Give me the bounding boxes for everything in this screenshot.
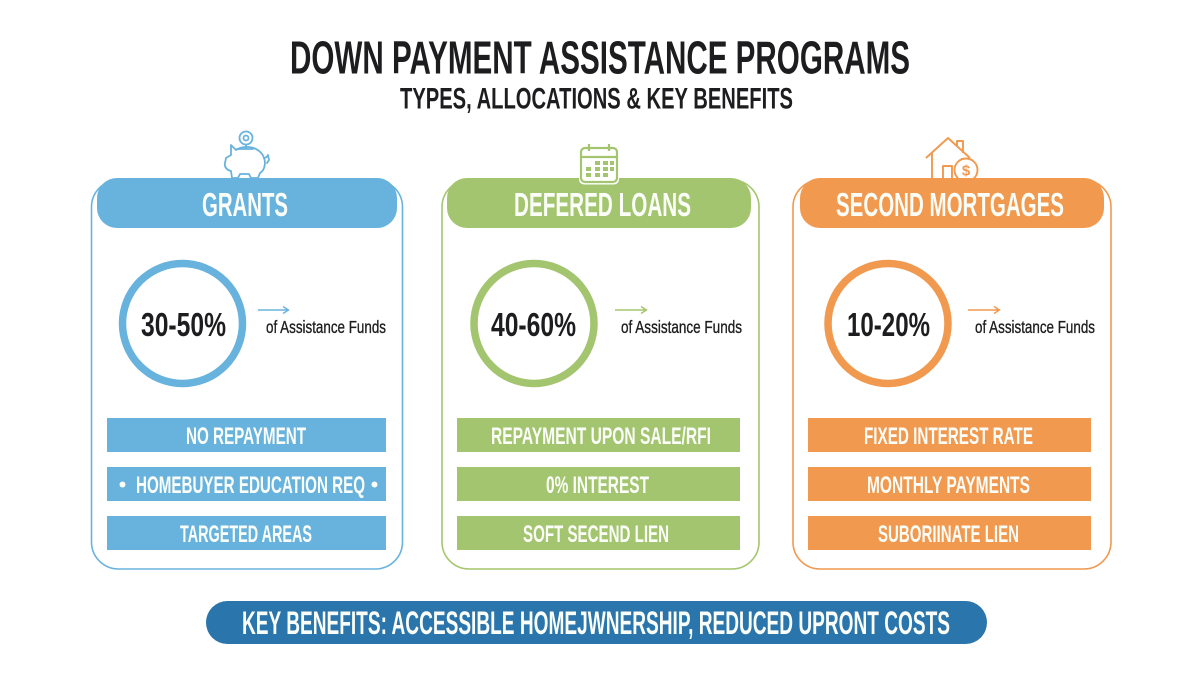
feature: fixed interest rate: [808, 418, 1091, 452]
panel: grants: [92, 132, 402, 569]
header: defered loans: [447, 178, 751, 228]
feature: no repayment: [107, 418, 386, 452]
feature: soft second lien: SOFT SECEND LIEN: [523, 521, 669, 548]
donut: 10-20%: 10-20%: [847, 306, 930, 343]
header: grants: GRANTS: [202, 186, 288, 223]
panel: deferred loans: [442, 144, 759, 569]
donut: 40-60%: 40-60%: [491, 306, 576, 343]
feature: repayment upon sale: [457, 418, 740, 452]
donut: 40-60%: [474, 264, 594, 384]
feature: subordinate lien: SUBORIINATE LIEN: [878, 521, 1019, 548]
feature: repayment upon sale: REPAYMENT UPON SALE/RFI: [491, 423, 711, 450]
feature: targeted areas: [107, 516, 386, 550]
feature: monthly payments: [808, 467, 1091, 501]
feature: targeted areas: TARGETED AREAS: [180, 521, 312, 548]
feature: no repayment: NO REPAYMENT: [186, 423, 306, 450]
feature: monthly payments: MONTHLY PAYMENTS: [867, 472, 1030, 499]
label: of assistance funds: of Assistance Funds: [975, 317, 1095, 337]
feature: homebuyer education: HOMEBUYER EDUCATION REQ: [136, 472, 365, 499]
header: grants: [97, 178, 397, 228]
header: second mortgages: [800, 178, 1104, 228]
feature: soft second lien: [457, 516, 740, 550]
label: of assistance funds: of Assistance Funds: [621, 317, 742, 337]
arrow: [968, 306, 1000, 314]
icon: house with dollar coin: $: [962, 162, 971, 180]
feature: 0% interest: 0% INTEREST: [546, 472, 649, 499]
donut: 30-50%: 30-50%: [141, 306, 226, 343]
arrow: [258, 306, 288, 314]
feature: 0% interest: [457, 467, 740, 501]
feature: subordinate lien: [808, 516, 1091, 550]
donut: 30-50%: [122, 264, 242, 384]
icon: house with dollar coin: [926, 138, 978, 182]
label: of assistance funds: of Assistance Funds: [266, 317, 386, 337]
header: defered loans: DEFERED LOANS: [514, 186, 691, 223]
feature: fixed interest rate: FIXED INTEREST RATE: [864, 423, 1033, 450]
icon: calendar: [579, 144, 619, 184]
icon: piggy bank: [225, 132, 269, 178]
arrow: [615, 306, 646, 314]
key benefits banner: [206, 601, 987, 644]
header: second mortgages: SECOND MORTGAGES: [836, 186, 1064, 223]
subtitle: TYPES, ALLOCATIONS & KEY BENEFITS: [400, 82, 793, 116]
feature: homebuyer education: [107, 467, 386, 501]
donut: 10-20%: [828, 264, 948, 384]
panel: second mortgages: [793, 138, 1111, 569]
